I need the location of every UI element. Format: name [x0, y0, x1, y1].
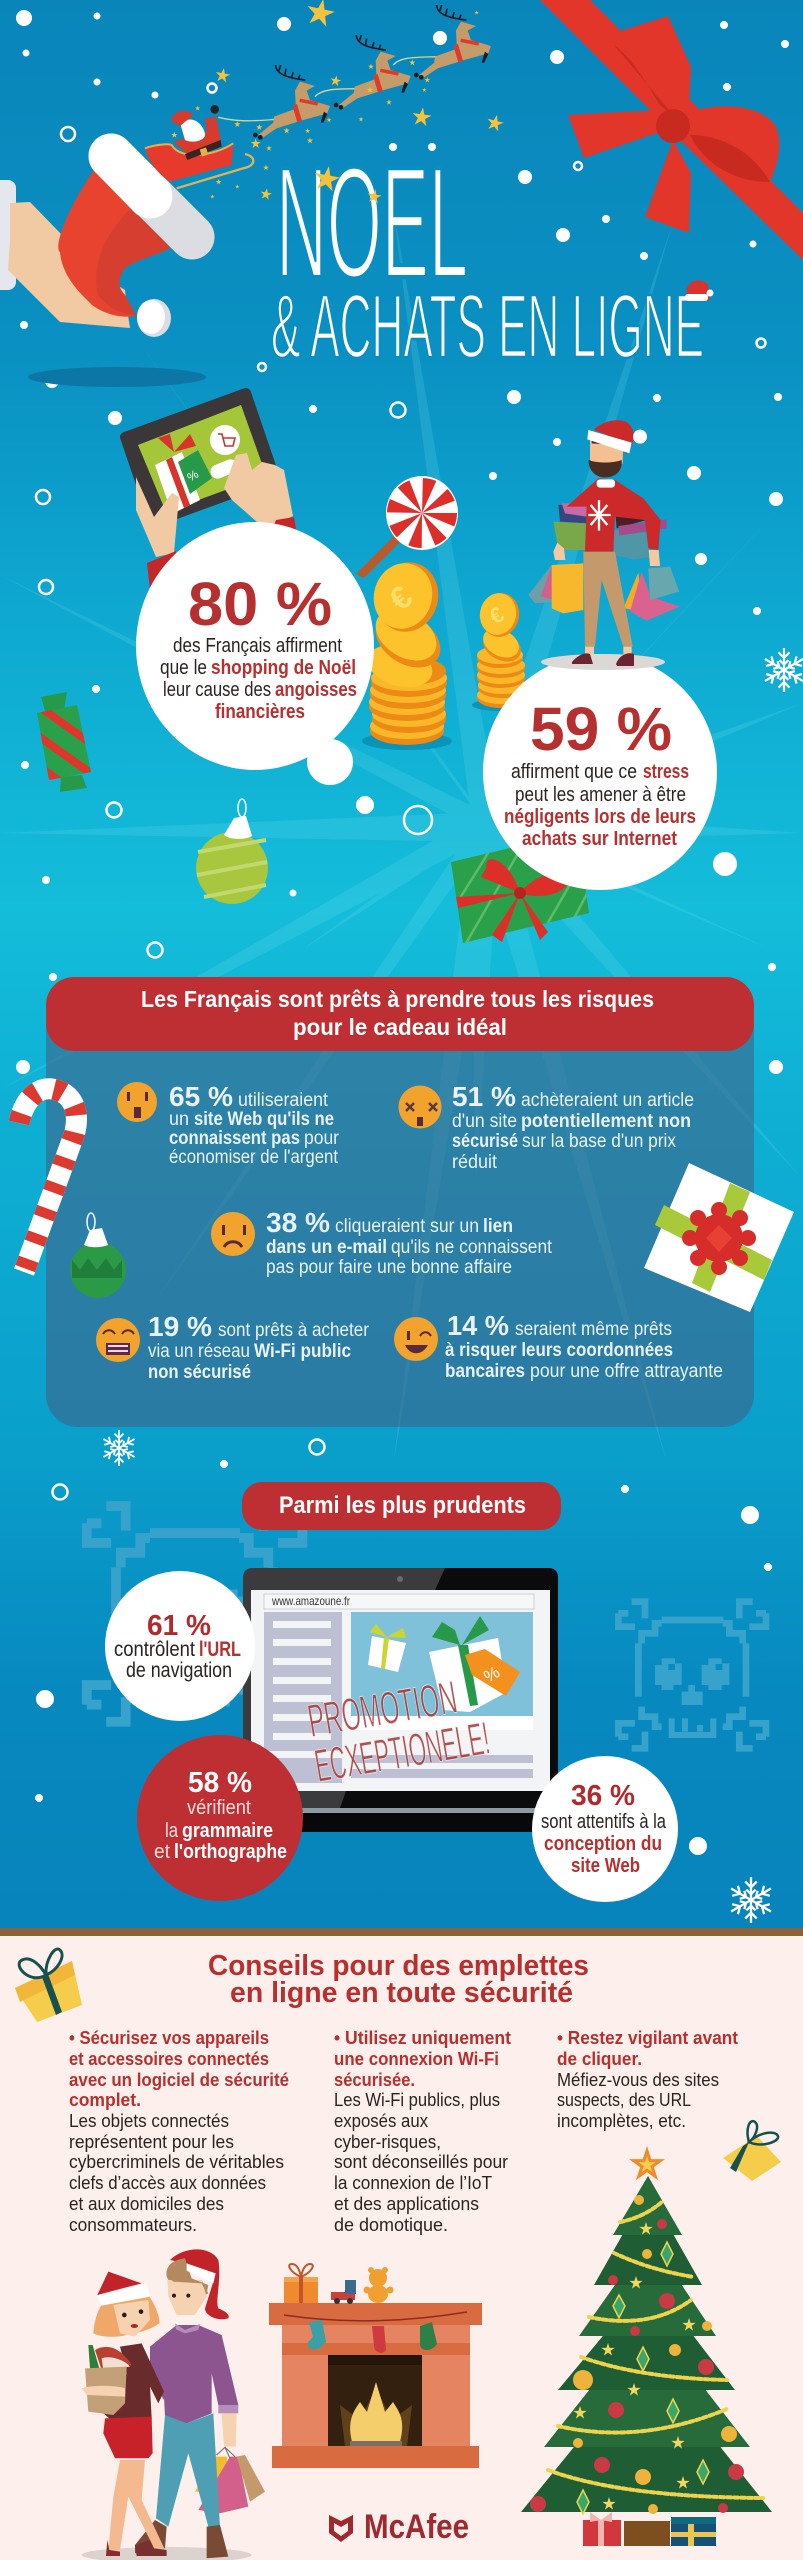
stat: 65 %: utiliseraient: [238, 1090, 329, 1111]
tip column 2: la connexion de l’IoT: [334, 2172, 492, 2193]
promo text: PROMOTION: [304, 1671, 461, 1747]
icon: surprised emoji: [117, 1082, 157, 1122]
stat: 65 %: économiser de l'argent: [169, 1147, 339, 1168]
stat: 14 %: bancaires: [445, 1361, 525, 1382]
tip column 3: incomplètes, etc.: [557, 2110, 686, 2131]
panel: tips background: [0, 1928, 803, 2560]
icon: tiny santa hat on title: [685, 281, 714, 301]
stat: 65 %: pour: [304, 1128, 340, 1149]
icon: green gift: [451, 848, 589, 943]
icon: pixel skull and bones left: [87, 1506, 302, 1722]
grocery bag: [82, 2345, 132, 2415]
stat: 51 %: réduit: [452, 1152, 498, 1173]
tip column 3: Méfiez-vous des sites: [557, 2069, 719, 2090]
icon: christmas tree: [521, 2146, 772, 2514]
gold baubles: [573, 2195, 737, 2514]
tip column 1: et aux domiciles des: [69, 2193, 224, 2214]
garlands: [548, 2201, 763, 2498]
stars: [171, 0, 505, 204]
stat: 38 %: pas pour faire une bonne affaire: [266, 1257, 512, 1278]
icon: laptop with fake shop: [243, 1568, 558, 1832]
tips heading: en ligne en toute sécurité: [230, 1977, 573, 2009]
callout: 80 % bubble: [136, 522, 374, 785]
tip column 1: • Sécurisez vos appareils: [69, 2027, 269, 2048]
stat description: achats sur Internet: [522, 828, 677, 850]
man's shoes: [572, 653, 634, 666]
stat: 38 %: lien: [483, 1216, 513, 1237]
stat: 65 %: site Web qu'ils ne: [194, 1109, 334, 1130]
icon: candy cane: [19, 1089, 76, 1272]
stat: 19 %: via un réseau: [148, 1341, 250, 1362]
heading: cautious: Parmi les plus prudents: [279, 1492, 526, 1519]
address bar: [264, 1594, 534, 1609]
stat: 65 %: un: [169, 1109, 189, 1130]
stat: 51 %: sécurisé: [452, 1131, 518, 1152]
tip column 2: sécurisée.: [334, 2069, 415, 2090]
icon: winking emoji: [394, 1317, 438, 1361]
light rays: [0, 200, 803, 1460]
tip column 2: de domotique.: [334, 2214, 448, 2235]
tip column 1: représentent pour les: [69, 2131, 234, 2152]
stat: 19 %: non sécurisé: [148, 1362, 251, 1383]
tips heading: [208, 1950, 589, 2009]
stat: 38 %: [211, 1207, 553, 1278]
teddy bear: [364, 2267, 394, 2303]
stat: 51 %: 51 %: [452, 1081, 516, 1112]
tip column 2: et des applications: [334, 2193, 479, 2214]
callout: 61 %: de navigation: [126, 1659, 232, 1682]
stat number: 59 %: [530, 695, 672, 763]
tip column 1: cybercriminels de véritables: [69, 2151, 284, 2172]
tip column 3: [557, 2027, 738, 2131]
icon: santa sleigh and reindeer: [145, 5, 491, 188]
stat description: négligents lors de leurs: [504, 806, 696, 828]
woman: [93, 2272, 167, 2556]
tree stars: [573, 2222, 696, 2510]
stat description: financières: [215, 701, 305, 723]
tip column 1: complet.: [69, 2089, 141, 2110]
left hand: [136, 477, 179, 557]
tip column 2: exposés aux: [334, 2110, 429, 2131]
icon: white gift with red bow: [644, 1163, 794, 1312]
icon: red gift ribbon bow: [540, 0, 803, 260]
callout: 58 %: 58 %: [188, 1767, 252, 1799]
stat: 19 %: sont prêts à acheter: [218, 1320, 370, 1341]
sidebar: [264, 1612, 342, 1783]
snow rings: [36, 84, 766, 1500]
mantel garland: [284, 2312, 467, 2321]
panel: risks: [46, 977, 754, 1427]
icon: yellow gift left: [15, 1949, 82, 2022]
stat number: 80 %: [188, 570, 332, 638]
tip column 1: [69, 2027, 289, 2235]
product image: %: [480, 1662, 503, 1686]
icon: pixel skull and bones right: [618, 1602, 766, 1748]
icon: snowflake bottom right: [728, 1877, 774, 1923]
stat description: des Français affirment: [173, 635, 342, 657]
callout: 61 %: l'URL: [199, 1638, 241, 1661]
icon: tall coin stack: [362, 555, 452, 750]
callout: 36 %: 36 %: [571, 1780, 635, 1812]
tips heading: Conseils pour des emplettes: [208, 1950, 589, 1982]
stat: 14 %: 14 %: [447, 1310, 509, 1341]
stat: 14 %: seraient même prêts: [515, 1319, 672, 1340]
bags: [195, 2447, 265, 2513]
callout: 58 %: grammaire: [182, 1820, 273, 1842]
icon: hand holding santa hat: [0, 156, 206, 387]
tip column 3: • Restez vigilant avant: [557, 2027, 738, 2048]
background: [0, 0, 803, 1930]
stat: 14 %: à risquer leurs coordonnées: [445, 1340, 673, 1361]
stat: 65 %: connaissent pas: [169, 1128, 300, 1149]
stat description: shopping de Noël: [211, 657, 356, 679]
tip column 3: suspects, des URL: [557, 2089, 691, 2110]
stat: 14 %: pour une offre attrayante: [530, 1361, 723, 1382]
illustration: couple with shopping: [82, 2249, 265, 2560]
stat: 51 %: [398, 1081, 694, 1173]
icon: hands with tablet: [125, 393, 297, 590]
tip column 1: consommateurs.: [69, 2214, 197, 2235]
present on mantel: [284, 2264, 318, 2303]
icon: tall coin stack: €: [382, 578, 419, 618]
right sleeve: [270, 517, 297, 535]
tip column 2: cyber-risques,: [334, 2131, 441, 2152]
stat: 65 %: 65 %: [169, 1081, 233, 1112]
callout: 36 %: sont attentifs à la: [541, 1811, 667, 1833]
callout: 59 % bubble: [483, 653, 717, 890]
tip column 2: • Utilisez uniquement: [334, 2027, 511, 2048]
callout: 36 %: conception du: [544, 1833, 662, 1855]
icon: lime christmas ornament: [196, 799, 268, 904]
stat: 38 %: 38 %: [266, 1207, 330, 1238]
stat: 19 %: 19 %: [148, 1311, 212, 1342]
icon: short coin stack: €: [485, 601, 508, 629]
icon: grimacing emoji: [96, 1318, 140, 1362]
stat description: [504, 761, 696, 850]
toy train: [331, 2280, 356, 2304]
callout: 36 %: [532, 1756, 678, 1902]
left sleeve: [147, 551, 176, 590]
stat: 38 %: qu'ils ne connaissent: [391, 1237, 553, 1258]
diamonds: [577, 2242, 709, 2514]
callout: 61 %: 61 %: [147, 1610, 211, 1642]
stat: 65 %: [117, 1081, 340, 1168]
callout: 58 %: vérifient: [187, 1797, 251, 1819]
tip column 1: avec un logiciel de sécurité: [69, 2069, 289, 2090]
stat: 51 %: d'un site: [452, 1111, 517, 1132]
icon: man with shopping bags: [528, 420, 680, 655]
icon: laptop with fake shop: ECXEPTIONELE!: [311, 1712, 493, 1792]
tip column 2: sont déconseillés pour: [334, 2151, 508, 2172]
icon: presents under the tree: [583, 2512, 716, 2546]
logo: McAfee: McAfee: [364, 2508, 469, 2546]
stat: 51 %: achèteraient un article: [521, 1090, 694, 1111]
stat: 14 %: [394, 1310, 723, 1382]
stat description: [160, 635, 357, 723]
tip column 3: de cliquer.: [557, 2048, 642, 2069]
red baubles: [530, 2219, 744, 2513]
logo: McAfee: [329, 2508, 469, 2546]
tip column 1: et accessoires connectés: [69, 2048, 269, 2069]
icon: sad emoji: [211, 1212, 255, 1256]
callout: 61 %: [105, 1571, 255, 1721]
stat: 19 %: Wi-Fi public: [254, 1341, 351, 1362]
address bar: www.amazoune.fr: [271, 1594, 350, 1608]
stat: 38 %: cliqueraient sur un: [335, 1216, 479, 1237]
callout: 58 %: [137, 1735, 303, 1901]
stat description: affirment que ce: [511, 761, 637, 783]
stockings: [308, 2320, 437, 2353]
product image: [351, 1612, 533, 1730]
stat description: peut les amener à être: [515, 784, 686, 806]
icon: snowflake lower left: [101, 1430, 137, 1466]
stat description: que le: [160, 657, 207, 679]
callout: 36 %: site Web: [571, 1855, 640, 1877]
tip column 2: [334, 2027, 511, 2235]
stat description: leur cause des: [163, 679, 271, 701]
icon: lollipop: [356, 476, 458, 578]
stat: 38 %: dans un e-mail: [266, 1237, 387, 1258]
stat description: angoisses: [275, 679, 357, 701]
icon: knocked-out emoji: [398, 1086, 442, 1128]
panel heading: [46, 977, 754, 1051]
tree top star: [629, 2146, 665, 2180]
icon: short coin stack: [472, 590, 528, 711]
stat description: stress: [643, 761, 689, 783]
callout: 58 %: l'orthographe: [174, 1841, 287, 1863]
tip column 2: une connexion Wi-Fi: [334, 2048, 499, 2069]
icon: yellow gift right: [723, 2121, 781, 2181]
tip column 1: clefs d’accès aux données: [69, 2172, 266, 2193]
panel heading: Les Français sont prêts à prendre tous les risques: [141, 986, 654, 1012]
tip column 1: Les objets connectés: [69, 2110, 229, 2131]
icon: fireplace: [269, 2264, 482, 2468]
icon: green christmas ornament: [70, 1213, 126, 1298]
stat: 19 %: [96, 1311, 370, 1383]
right hand: [224, 453, 293, 530]
title: NOEL: [276, 135, 468, 311]
stat: 51 %: potentiellement non: [521, 1111, 691, 1132]
heading: cautious: [242, 1482, 561, 1530]
snow dots: [16, 10, 789, 1855]
icon: hands with tablet: %: [185, 467, 201, 484]
callout: 58 %: et: [154, 1841, 170, 1863]
icon: snowflake right: [762, 648, 803, 692]
callout: 58 %: la: [165, 1820, 179, 1842]
promo text: [304, 1671, 493, 1792]
man: [135, 2249, 238, 2558]
icon: striped candy: [37, 692, 91, 792]
stat: 51 %: sur la base d'un prix: [522, 1131, 676, 1152]
panel heading: pour le cadeau idéal: [293, 1014, 507, 1040]
callout: 61 %: contrôlent: [114, 1638, 195, 1661]
tip column 2: Les Wi-Fi publics, plus: [334, 2089, 500, 2110]
